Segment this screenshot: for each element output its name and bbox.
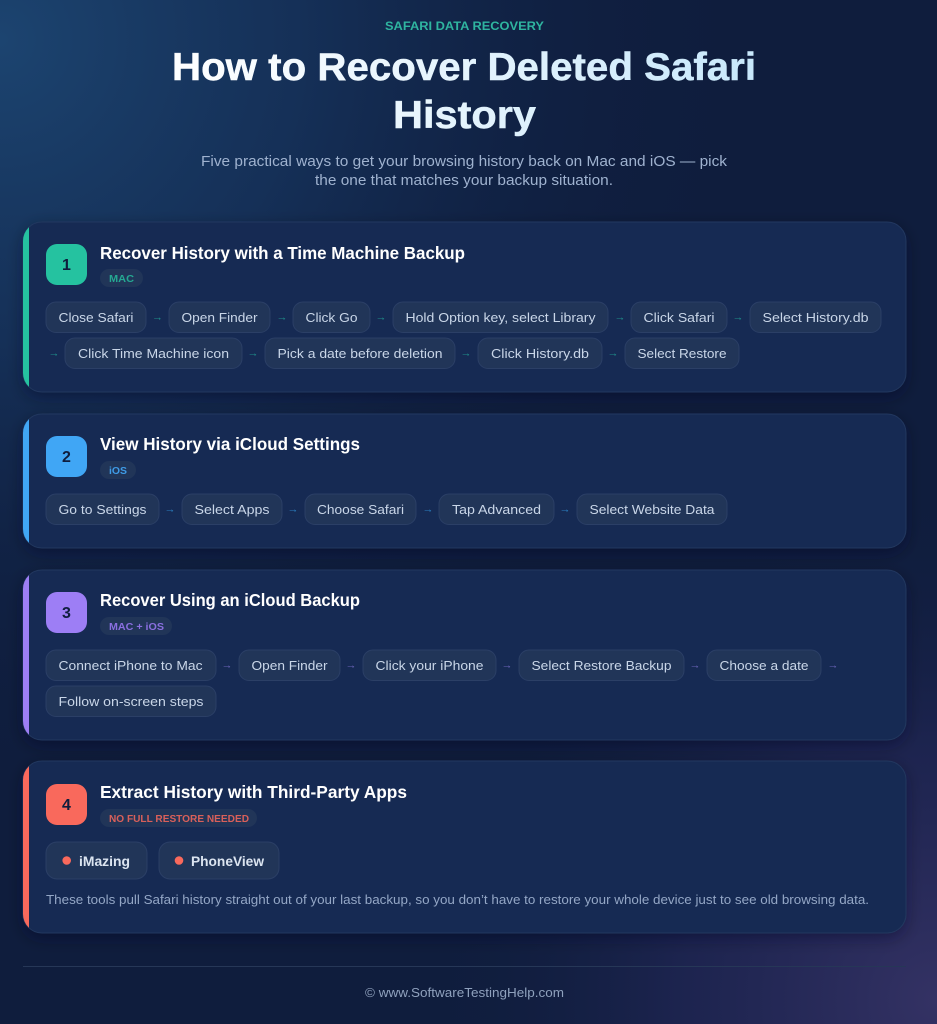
steps flow 1: → bbox=[732, 312, 744, 324]
steps flow 3: Connect iPhone to Mac bbox=[58, 658, 203, 673]
app chip: PhoneView bbox=[159, 842, 279, 879]
steps flow 1: Pick a date before deletion bbox=[278, 346, 442, 361]
description text: These tools pull Safari history straight out of your last backup, so you don’t have to restore your whole device just to see old browsing data. bbox=[46, 892, 869, 907]
steps flow 2: Go to Settings bbox=[58, 502, 147, 517]
steps flow 3: → bbox=[828, 660, 838, 672]
number badge 4 bbox=[46, 784, 87, 825]
steps flow 1: Hold Option key, select Library bbox=[406, 310, 596, 325]
title: History bbox=[393, 94, 536, 137]
steps flow 1: Click Safari bbox=[644, 310, 715, 325]
steps flow 3: → bbox=[690, 660, 700, 672]
steps flow 1 bbox=[46, 302, 881, 368]
eyebrow label: SAFARI DATA RECOVERY bbox=[385, 19, 544, 33]
app chip: iMazing bbox=[46, 842, 147, 879]
steps flow 2: → bbox=[560, 504, 570, 516]
steps flow 2: → bbox=[164, 504, 176, 516]
heading 4: Extract History with Third-Party Apps bbox=[100, 782, 407, 802]
steps flow 1: → bbox=[376, 312, 386, 324]
steps flow 3 bbox=[46, 650, 838, 716]
steps flow 2: Select Website Data bbox=[590, 502, 715, 517]
steps flow 3: Follow on-screen steps bbox=[58, 694, 204, 709]
number badge 1 bbox=[46, 244, 87, 285]
steps flow 1: Select History.db bbox=[762, 310, 868, 325]
steps flow 3: Click your iPhone bbox=[376, 658, 484, 673]
tag: iOS: iOS bbox=[109, 466, 127, 477]
steps flow 3: → bbox=[222, 660, 232, 672]
panel: method 1 Time Machine bbox=[23, 222, 906, 392]
steps flow 1: → bbox=[460, 348, 472, 360]
steps flow 1: → bbox=[276, 312, 288, 324]
heading 3: Recover Using an iCloud Backup bbox=[100, 590, 360, 610]
footer: © www.SoftwareTestingHelp.com bbox=[365, 985, 564, 1000]
number badge 1: 1 bbox=[62, 257, 71, 274]
tag: MAC bbox=[100, 269, 143, 287]
number badge 3 bbox=[46, 592, 87, 633]
tag: MAC: MAC bbox=[109, 274, 134, 285]
title: How to Recover Deleted Safari bbox=[172, 46, 756, 89]
app chip: iMazing: iMazing bbox=[79, 853, 130, 869]
steps flow 2: → bbox=[288, 504, 298, 516]
tag: iOS bbox=[100, 461, 136, 479]
panel: method 3 iCloud Backup bbox=[23, 570, 906, 740]
tag: MAC + iOS: MAC + iOS bbox=[109, 622, 164, 633]
number badge 4: 4 bbox=[62, 797, 71, 814]
subtitle bbox=[201, 153, 728, 189]
steps flow 2: Tap Advanced bbox=[452, 502, 541, 517]
steps flow 2: Choose Safari bbox=[317, 502, 404, 517]
tag: no full restore needed bbox=[100, 809, 257, 827]
steps flow 3: Open Finder bbox=[252, 658, 328, 673]
number badge 2: 2 bbox=[62, 449, 71, 466]
subtitle: Five practical ways to get your browsing history back on Mac and iOS — pick bbox=[201, 153, 728, 170]
steps flow 3: → bbox=[346, 660, 356, 672]
steps flow 3: → bbox=[502, 660, 512, 672]
steps flow 1: Open Finder bbox=[182, 310, 258, 325]
title bbox=[172, 46, 756, 137]
app chip: PhoneView: PhoneView bbox=[191, 853, 264, 869]
steps flow 1: → bbox=[48, 348, 60, 360]
tag: MAC + iOS bbox=[100, 617, 172, 635]
panel: method 2 iCloud Settings bbox=[23, 414, 906, 548]
steps flow 1: → bbox=[608, 348, 618, 360]
steps flow 3: Choose a date bbox=[720, 658, 808, 673]
steps flow 1: Select Restore bbox=[638, 346, 726, 361]
heading 1: Recover History with a Time Machine Backup bbox=[100, 243, 465, 263]
steps flow 1: → bbox=[152, 312, 163, 324]
panel: method 4 Third-Party Apps bbox=[23, 761, 906, 933]
steps flow 2 bbox=[46, 494, 727, 524]
steps flow 1: Click Go bbox=[306, 310, 358, 325]
steps flow 1: Close Safari bbox=[58, 310, 134, 325]
steps flow 1: Click History.db bbox=[491, 346, 589, 361]
steps flow 2: Select Apps bbox=[194, 502, 270, 517]
subtitle: the one that matches your backup situation. bbox=[315, 172, 613, 189]
tag: no full restore needed: NO FULL RESTORE NEEDED bbox=[109, 814, 249, 825]
steps flow 2: → bbox=[422, 504, 434, 516]
steps flow 3: Select Restore Backup bbox=[532, 658, 672, 673]
steps flow 1: → bbox=[614, 312, 626, 324]
steps flow 1: → bbox=[248, 348, 258, 360]
number badge 2 bbox=[46, 436, 87, 477]
number badge 3: 3 bbox=[62, 605, 71, 622]
steps flow 1: Click Time Machine icon bbox=[78, 346, 229, 361]
heading 2: View History via iCloud Settings bbox=[100, 434, 360, 454]
